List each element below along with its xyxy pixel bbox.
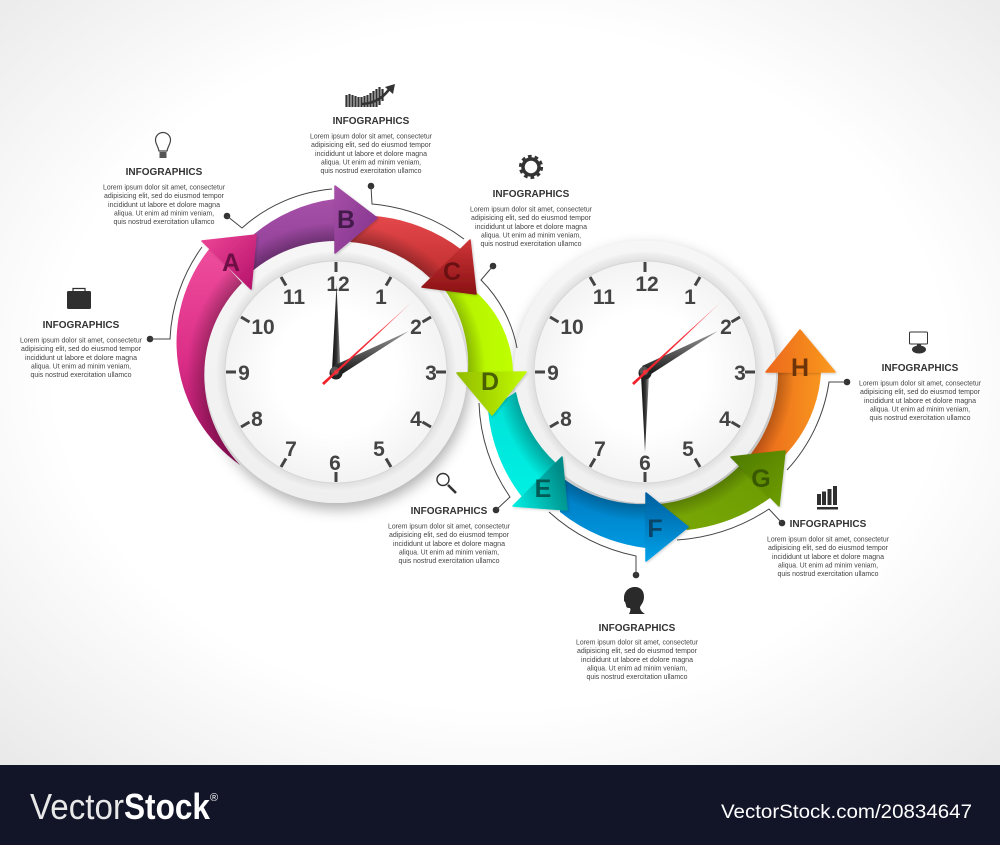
- footer logo: ®: [210, 792, 218, 804]
- text block: C: adipisicing elit, sed do eiusmod tempor: [471, 213, 592, 222]
- text block: F: adipisicing elit, sed do eiusmod tempor: [577, 646, 698, 655]
- text block: C: INFOGRAPHICS: [493, 189, 570, 200]
- connector: E: [479, 403, 510, 513]
- text block: E: INFOGRAPHICS: [411, 506, 488, 517]
- text block: H: Lorem ipsum dolor sit amet, consectetur: [859, 378, 982, 388]
- text block: A: [103, 167, 226, 226]
- text block: left: quis nostrud exercitation ullamco: [30, 370, 132, 379]
- clock: left: 7: [285, 438, 297, 461]
- text block: C: [470, 189, 593, 248]
- footer logo: [30, 786, 218, 827]
- text block: E: [388, 506, 511, 565]
- text block: left: adipisicing elit, sed do eiusmod tempor: [21, 344, 142, 353]
- text block: E: aliqua. Ut enim ad minim veniam,: [399, 548, 499, 556]
- arrow B: B: [337, 206, 355, 234]
- clock: left: 10: [251, 316, 275, 339]
- text block: left: incididunt ut labore et dolore magna: [25, 353, 137, 362]
- icon: briefcase: [67, 288, 91, 309]
- text block: A: adipisicing elit, sed do eiusmod tempor: [104, 191, 225, 200]
- arrow B: [250, 186, 377, 273]
- text block: G: Lorem ipsum dolor sit amet, consectetur: [767, 534, 890, 544]
- arrow E: E: [535, 475, 551, 503]
- text block: G: incididunt ut labore et dolore magna: [772, 552, 884, 561]
- connector: H: [787, 379, 850, 470]
- connector: A: [224, 189, 332, 228]
- clock: left: 12: [326, 273, 350, 296]
- text block: F: Lorem ipsum dolor sit amet, consectetur: [576, 638, 699, 646]
- icon: growth chart: [346, 84, 395, 107]
- arrow H: [750, 330, 835, 455]
- text block: E: adipisicing elit, sed do eiusmod tempor: [389, 530, 510, 539]
- arrow A: A: [222, 249, 240, 277]
- text block: left: INFOGRAPHICS: [43, 320, 120, 331]
- text block: left: [20, 320, 143, 379]
- text block: F: [576, 623, 699, 681]
- footer logo: Vector: [30, 786, 124, 827]
- text block: left: Lorem ipsum dolor sit amet, consectetur: [20, 336, 143, 344]
- text block: H: aliqua. Ut enim ad minim veniam,: [870, 404, 970, 414]
- text block: G: quis nostrud exercitation ullamco: [778, 569, 879, 578]
- clock: right: 11: [593, 286, 615, 309]
- text block: H: [859, 363, 982, 422]
- arrow E: [488, 392, 567, 510]
- icon: monitor: [910, 332, 928, 354]
- footer logo: Stock: [124, 786, 211, 827]
- text block: A: incididunt ut labore et dolore magna: [108, 200, 220, 209]
- arrow G: [660, 451, 785, 530]
- text block: G: INFOGRAPHICS: [790, 519, 867, 530]
- text block: H: adipisicing elit, sed do eiusmod tempor: [860, 387, 981, 396]
- arrow A: [177, 235, 256, 465]
- clock: left: 2: [410, 316, 422, 339]
- text block: F: INFOGRAPHICS: [599, 623, 676, 634]
- text block: H: incididunt ut labore et dolore magna: [864, 396, 976, 405]
- arrow C: [350, 216, 476, 294]
- connector: C: [481, 263, 517, 348]
- clock: left: 8: [251, 408, 263, 431]
- icon: magnifier: [437, 474, 456, 493]
- text block: G: [767, 519, 890, 578]
- text block: A: Lorem ipsum dolor sit amet, consectetur: [103, 182, 226, 192]
- text block: B: adipisicing elit, sed do eiusmod tempor: [311, 140, 432, 149]
- text block: E: Lorem ipsum dolor sit amet, consectetur: [388, 522, 511, 530]
- text block: G: aliqua. Ut enim ad minim veniam,: [778, 560, 878, 570]
- text block: B: [310, 116, 433, 175]
- clock: right: 10: [560, 316, 584, 339]
- arrow D: D: [481, 368, 499, 396]
- clock: right: 6: [639, 452, 651, 475]
- clock: right: 7: [594, 438, 606, 461]
- clock: left: 1: [375, 286, 387, 309]
- text block: E: incididunt ut labore et dolore magna: [393, 539, 505, 548]
- clock: right: 3: [734, 362, 746, 385]
- icon: head: [624, 587, 645, 614]
- connector: G: [677, 509, 785, 540]
- text block: C: incididunt ut labore et dolore magna: [475, 222, 587, 231]
- text block: C: Lorem ipsum dolor sit amet, consectetur: [470, 204, 593, 214]
- clock: right: [514, 241, 776, 503]
- clock: left: 11: [283, 286, 305, 309]
- text block: F: aliqua. Ut enim ad minim veniam,: [587, 664, 687, 672]
- text block: B: Lorem ipsum dolor sit amet, consectetur: [310, 132, 433, 140]
- connector: B: [368, 183, 464, 239]
- clock: right: 12: [635, 273, 659, 296]
- text block: left: aliqua. Ut enim ad minim veniam,: [31, 362, 131, 370]
- icon: gear: [520, 156, 542, 178]
- text block: G: adipisicing elit, sed do eiusmod tempor: [768, 543, 889, 552]
- text block: B: INFOGRAPHICS: [333, 116, 410, 127]
- clock: left: 9: [238, 362, 250, 385]
- text block: H: INFOGRAPHICS: [882, 363, 959, 374]
- footer url: VectorStock.com/20834647: [721, 802, 972, 823]
- text block: B: quis nostrud exercitation ullamco: [320, 166, 422, 175]
- text block: A: INFOGRAPHICS: [126, 167, 203, 178]
- text block: A: aliqua. Ut enim ad minim veniam,: [114, 208, 214, 218]
- arrow H: H: [791, 354, 809, 382]
- text block: H: quis nostrud exercitation ullamco: [870, 413, 971, 422]
- text block: C: aliqua. Ut enim ad minim veniam,: [481, 230, 581, 240]
- icon: bar chart: [817, 486, 838, 510]
- arrow G: G: [751, 465, 771, 493]
- clock: right: 5: [682, 438, 694, 461]
- clock: right: 4: [719, 408, 731, 431]
- clock: left: 6: [329, 452, 341, 475]
- clock: left: 3: [425, 362, 437, 385]
- icon: light bulb: [156, 133, 170, 158]
- arrow D: [445, 290, 526, 415]
- arrow F: F: [647, 515, 663, 543]
- clock: right: 2: [720, 316, 732, 339]
- text block: E: quis nostrud exercitation ullamco: [398, 556, 500, 565]
- text block: A: quis nostrud exercitation ullamco: [114, 217, 215, 226]
- text block: F: incididunt ut labore et dolore magna: [581, 655, 693, 664]
- text block: C: quis nostrud exercitation ullamco: [480, 239, 582, 248]
- text block: B: incididunt ut labore et dolore magna: [315, 149, 427, 158]
- clock: right: 8: [560, 408, 572, 431]
- text block: B: aliqua. Ut enim ad minim veniam,: [321, 158, 421, 166]
- clock: left: [205, 241, 467, 503]
- clock: left: 5: [373, 438, 385, 461]
- arrow C: C: [443, 258, 461, 286]
- arrow F: [560, 476, 688, 561]
- clock: right: 1: [684, 286, 696, 309]
- text block: F: quis nostrud exercitation ullamco: [586, 672, 688, 681]
- connector: left block: [147, 247, 202, 342]
- footer bar: [0, 765, 1000, 845]
- clock: left: 4: [410, 408, 422, 431]
- connector: F: [549, 512, 639, 578]
- clock: right: 9: [547, 362, 559, 385]
